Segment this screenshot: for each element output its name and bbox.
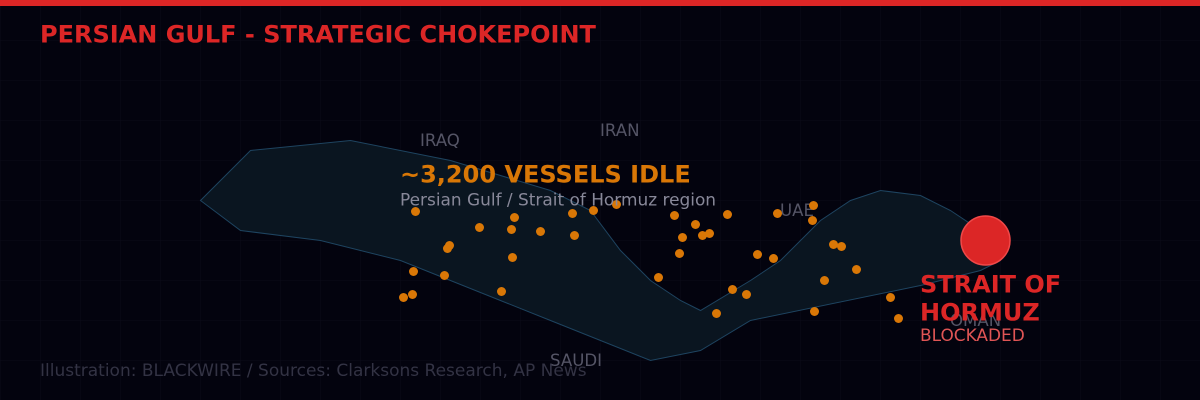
vessels subheading: Persian Gulf / Strait of Hormuz region bbox=[400, 190, 716, 210]
strait callout: HORMUZ bbox=[920, 298, 1040, 326]
country label: Oman: OMAN bbox=[950, 311, 1001, 330]
top accent bar bbox=[0, 0, 1200, 6]
strait callout: STRAIT OF bbox=[920, 270, 1061, 298]
map: persian gulf water bbox=[200, 140, 1000, 360]
country label: UAE: UAE bbox=[780, 201, 814, 220]
strait callout: BLOCKADED bbox=[920, 325, 1025, 345]
title: PERSIAN GULF - STRATEGIC CHOKEPOINT bbox=[40, 20, 597, 48]
source credit: Illustration: BLACKWIRE / Sources: Clarksons Research, AP News bbox=[40, 361, 587, 381]
country label: Iraq: IRAQ bbox=[420, 131, 460, 150]
idle vessel dots bbox=[399, 200, 903, 323]
country label: Iran: IRAN bbox=[600, 121, 640, 140]
vessels idle headline: ~3,200 VESSELS IDLE bbox=[400, 160, 691, 188]
strait of hormuz marker bbox=[961, 216, 1010, 265]
strait callout bbox=[920, 270, 1061, 345]
country label: Saudi: SAUDI bbox=[550, 351, 602, 370]
